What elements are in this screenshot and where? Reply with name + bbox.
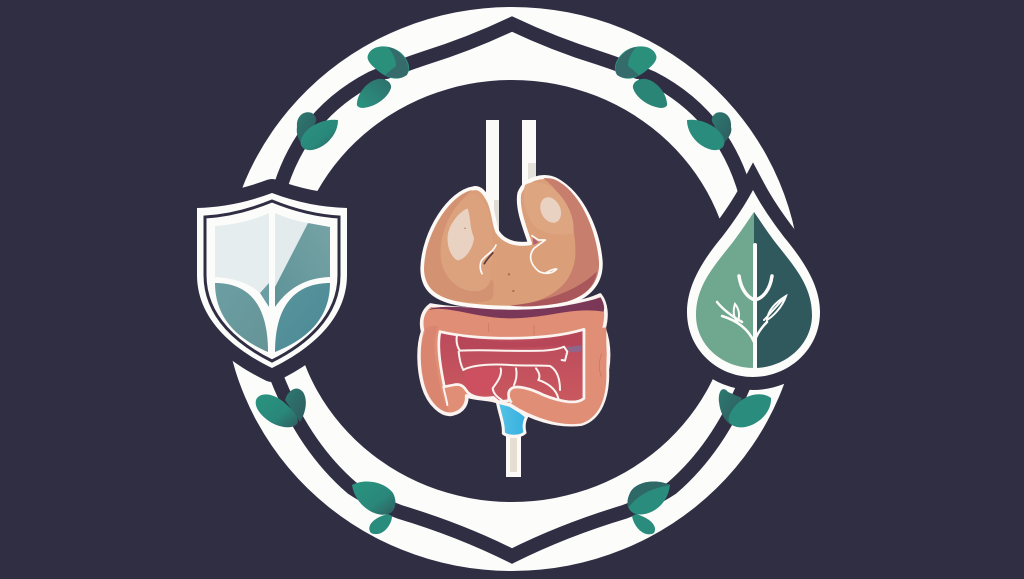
leaf wisps (385, 71, 639, 80)
shield inner line (205, 201, 339, 361)
leaves: upper right pair (687, 112, 731, 150)
colon fold marks (488, 323, 602, 377)
grey-violet patch (567, 345, 582, 352)
right highlight (536, 194, 565, 226)
ring band: dark groove (274, 24, 750, 556)
shield icon (197, 193, 347, 368)
crease pink notch (533, 238, 539, 245)
right lobe light tone (523, 182, 574, 235)
maroon band (429, 297, 604, 318)
stomach dots (464, 228, 514, 292)
shield upper left panel (215, 213, 269, 293)
drop dark halo (687, 190, 820, 377)
water drop icon (687, 190, 820, 377)
bottom crescent (510, 272, 597, 306)
shield teal stripe (275, 223, 330, 307)
left highlight (447, 208, 474, 260)
shield dark halo (197, 193, 347, 368)
lower tube (506, 430, 521, 477)
plant in drop (717, 245, 786, 368)
shield white body (197, 193, 347, 368)
shield centre sliver (260, 283, 269, 307)
shield left leaf (215, 283, 268, 352)
right pink shade (520, 178, 599, 306)
drop right half (754, 212, 812, 368)
darker upper band (458, 332, 582, 349)
stomach body (422, 177, 601, 308)
left lobe inner (441, 193, 494, 291)
leaves: lower right pair (719, 389, 771, 427)
small intestine (439, 329, 584, 402)
leaves: bottom right pair (627, 482, 670, 534)
blue duct (497, 402, 527, 436)
left lobe outer shade (424, 190, 494, 302)
stomach (422, 177, 601, 308)
shield upper right panel (275, 213, 308, 287)
leaves: top right pair (615, 46, 667, 108)
intestines (419, 295, 609, 436)
tail inner outline (509, 329, 584, 403)
shield right leaf (275, 283, 330, 352)
colon left shading (421, 326, 449, 412)
esophagus tubes (486, 120, 536, 238)
intestine folds (443, 335, 567, 405)
colon tail (509, 327, 606, 424)
drop white body (687, 190, 820, 377)
stomach crease lines (480, 236, 557, 274)
leaves: lower left pair (256, 388, 306, 427)
leaves: bottom left pair (352, 482, 395, 534)
colon silhouette (419, 295, 609, 425)
leaves: upper left pair (297, 112, 338, 150)
drop left half (696, 212, 754, 368)
white ring (223, 7, 801, 571)
leaves: top left pair (357, 46, 409, 108)
red lobes (464, 367, 501, 395)
crease shadow (484, 252, 493, 264)
